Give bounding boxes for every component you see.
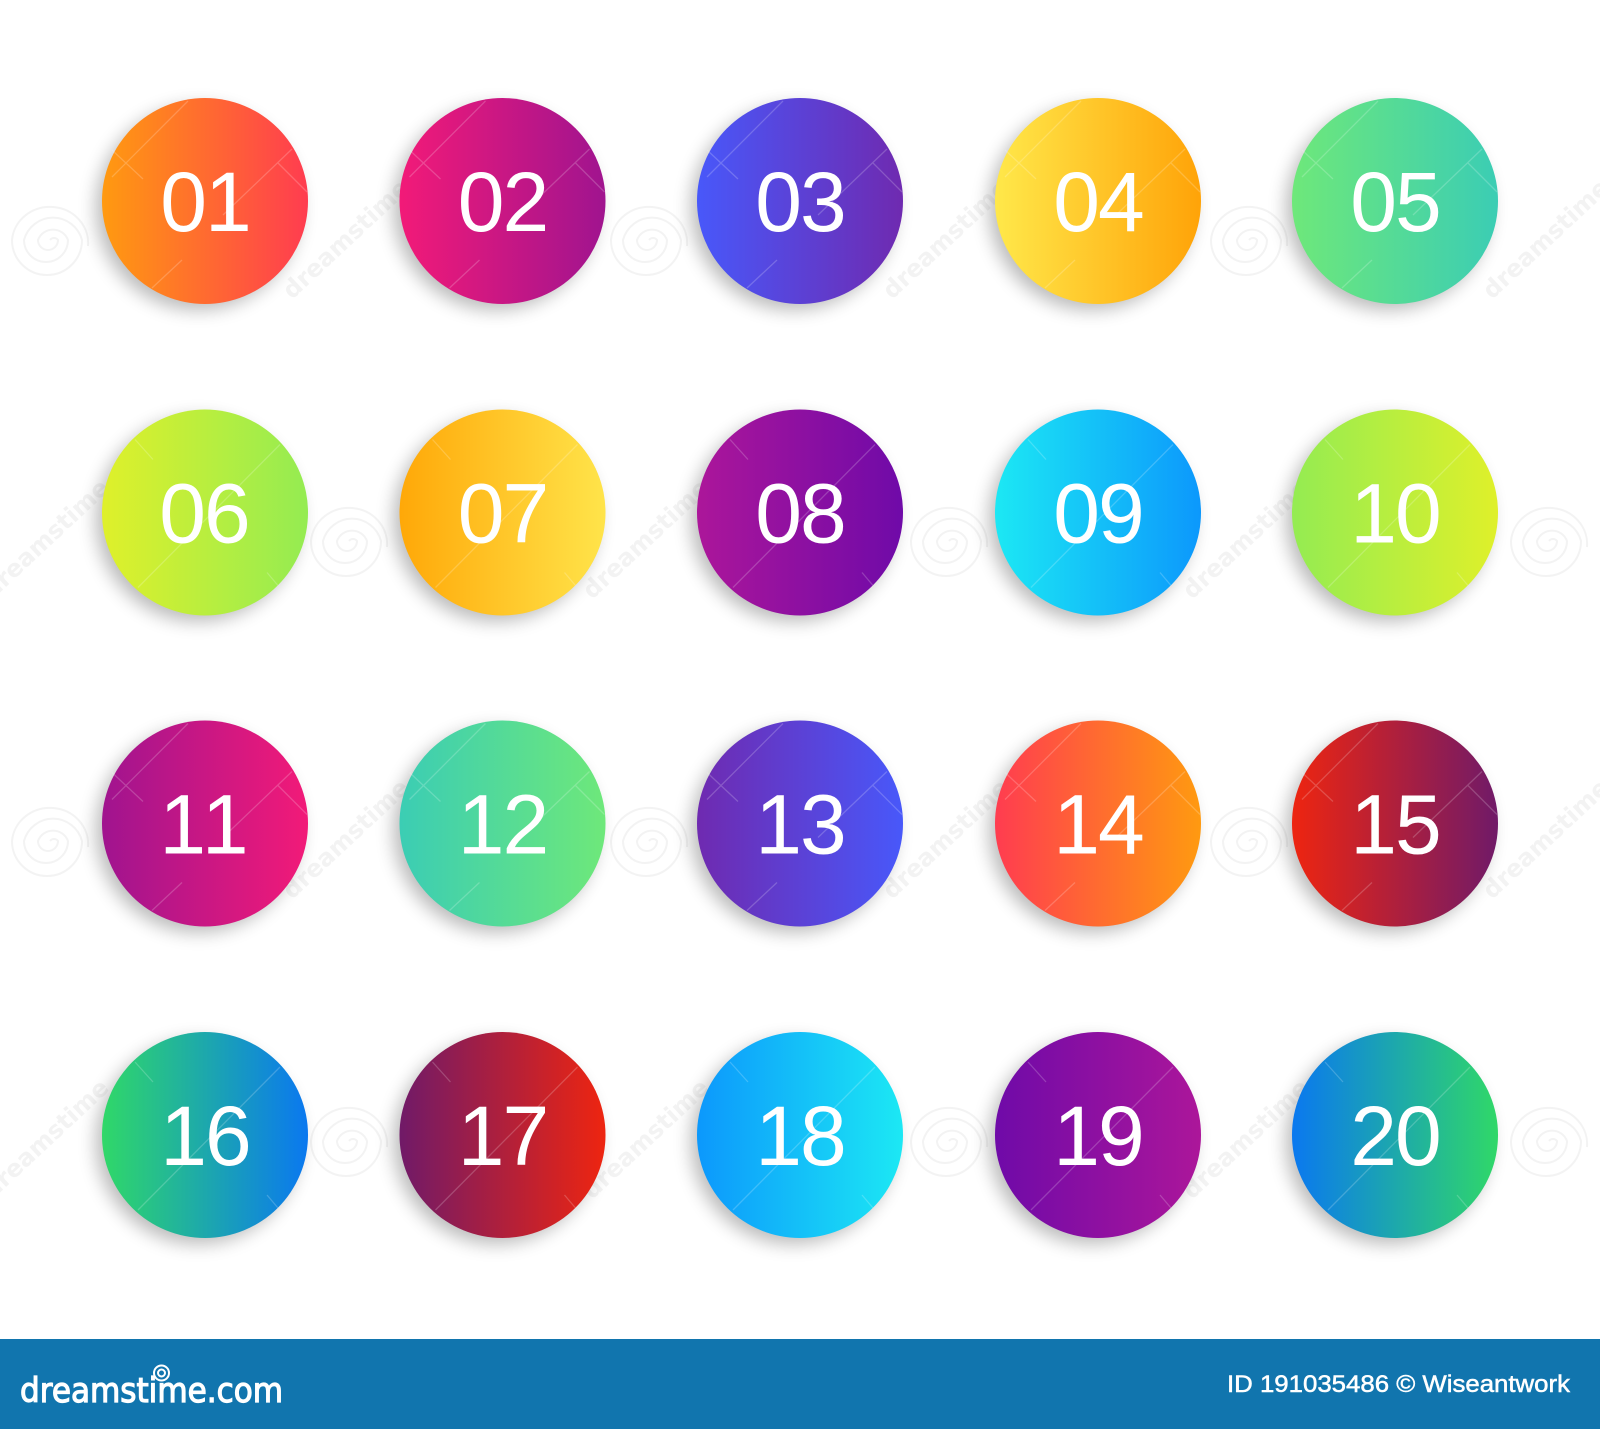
badge 18: 18 bbox=[755, 1089, 845, 1183]
badge 09 bbox=[989, 410, 1201, 622]
watermark pattern bbox=[0, 174, 1600, 1204]
badge 17 bbox=[394, 1032, 606, 1244]
badge 08 bbox=[691, 410, 903, 622]
badge 04: 04 bbox=[1053, 155, 1143, 249]
badge 10: 10 bbox=[1350, 466, 1440, 560]
badge 07: 07 bbox=[458, 466, 547, 560]
badge 01 bbox=[96, 98, 308, 310]
badge 13 bbox=[691, 720, 903, 932]
badge 05 bbox=[1286, 98, 1498, 310]
badge 19: 19 bbox=[1053, 1089, 1143, 1183]
badge 14: 14 bbox=[1053, 778, 1143, 872]
watermark pattern: dreamstime bbox=[1177, 474, 1314, 604]
watermark pattern: dreamstime bbox=[1177, 1074, 1314, 1204]
icon: logo spiral bbox=[154, 1366, 169, 1380]
badge 06 bbox=[96, 410, 308, 622]
badge 16: 16 bbox=[160, 1089, 250, 1183]
watermark pattern: dreamstime bbox=[877, 774, 1014, 904]
badge 02: 02 bbox=[458, 155, 547, 249]
badge 12 bbox=[394, 720, 606, 932]
badge 06: 06 bbox=[159, 466, 249, 560]
watermark pattern: dreamstime bbox=[577, 1074, 714, 1204]
watermark pattern: dreamstime bbox=[577, 474, 714, 604]
badge 09: 09 bbox=[1053, 466, 1143, 560]
badge 03: 03 bbox=[755, 155, 845, 249]
badge 18 bbox=[691, 1032, 903, 1244]
badge 20 bbox=[1286, 1032, 1498, 1244]
badge 11: 11 bbox=[159, 778, 251, 872]
badge 14 bbox=[989, 720, 1201, 932]
badge 19 bbox=[989, 1032, 1201, 1244]
badge 20: 20 bbox=[1350, 1089, 1440, 1183]
badge 10 bbox=[1286, 410, 1498, 622]
badge 05: 05 bbox=[1350, 155, 1440, 249]
badge 16 bbox=[96, 1032, 308, 1244]
badge 11 bbox=[96, 720, 308, 932]
badge 15: 15 bbox=[1350, 778, 1440, 872]
watermark pattern: dreamstime bbox=[277, 774, 414, 904]
badge 03 bbox=[691, 98, 903, 310]
footer image id and credit: ID 191035486 © Wiseantwork bbox=[1227, 1371, 1571, 1398]
badge 15 bbox=[1286, 720, 1498, 932]
badge 12: 12 bbox=[458, 778, 547, 872]
badge 13: 13 bbox=[755, 778, 845, 872]
badge 02 bbox=[394, 98, 606, 310]
watermark pattern: dreamstime bbox=[877, 174, 1014, 304]
badge 01: 01 bbox=[160, 155, 250, 249]
watermark pattern: dreamstime bbox=[277, 174, 414, 304]
footer logo text: dreamstime.com bbox=[20, 1371, 283, 1411]
badge 17: 17 bbox=[458, 1089, 547, 1183]
badge 04 bbox=[989, 98, 1201, 310]
footer band bbox=[0, 1339, 1600, 1429]
badge 07 bbox=[394, 410, 606, 622]
badge 08: 08 bbox=[755, 466, 845, 560]
